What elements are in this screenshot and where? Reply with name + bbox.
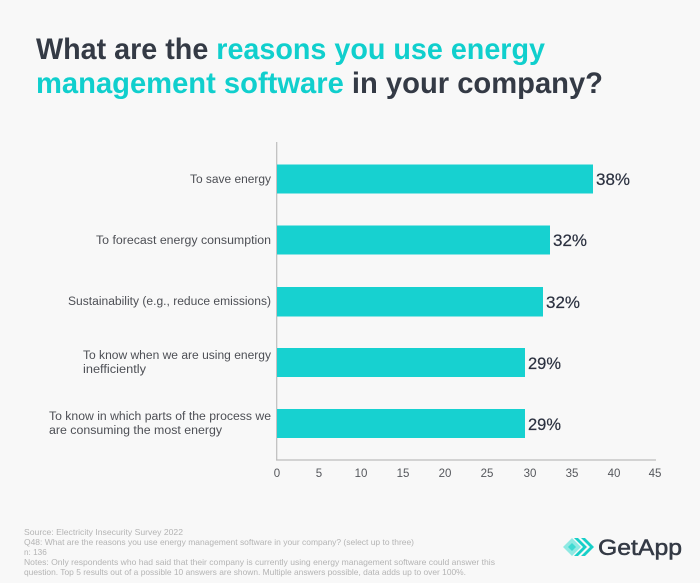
value labels: 38%: [596, 171, 630, 189]
axis tick labels: 25: [481, 468, 493, 480]
category labels: [49, 174, 271, 437]
category labels: To forecast energy consumption: [96, 235, 271, 247]
category labels: To know in which parts of the process we: [49, 411, 271, 423]
title: What are the reasons you use energy: [36, 33, 545, 66]
bars: [277, 164, 593, 438]
source notes: Notes: Only respondents who had said that their company is currently using energy management software could answer this: [24, 558, 495, 567]
axis tick labels: [274, 468, 661, 480]
title: management software in your company?: [36, 67, 603, 100]
bar chart: [49, 142, 661, 480]
source notes: n: 136: [24, 548, 47, 557]
value labels: 29%: [528, 416, 561, 434]
axis tick labels: 30: [524, 468, 536, 480]
source notes: Q48: What are the reasons you use energy management software in your company? (select up to three): [24, 538, 414, 547]
axes: [276, 142, 656, 460]
category labels: are consuming the most energy: [49, 425, 222, 437]
category labels: Sustainability (e.g., reduce emissions): [68, 296, 271, 308]
value labels: 32%: [546, 294, 580, 312]
axis tick labels: 40: [608, 468, 620, 480]
source notes: [24, 528, 495, 577]
axis tick labels: 35: [566, 468, 578, 480]
title: [36, 33, 603, 100]
axis tick labels: 15: [397, 468, 409, 480]
value labels: 29%: [528, 355, 561, 373]
category labels: inefficiently: [83, 364, 146, 376]
category labels: To save energy: [190, 174, 271, 186]
category labels: To know when we are using energy: [83, 350, 271, 362]
value labels: 32%: [553, 232, 587, 250]
value labels: [528, 171, 630, 434]
source notes: Source: Electricity Insecurity Survey 2022: [24, 528, 183, 537]
logo wordmark: GetApp: [598, 535, 682, 560]
icon: logo chevrons: [563, 538, 594, 556]
axis tick labels: 5: [316, 468, 322, 480]
axis tick labels: 45: [649, 468, 661, 480]
axis tick labels: 20: [439, 468, 451, 480]
GetApp logo: [563, 535, 682, 560]
axis tick labels: 10: [355, 468, 367, 480]
axis tick labels: 0: [274, 468, 280, 480]
source notes: question. Top 5 results out of a possible 10 answers are shown. Multiple answers possible, data adds up to over 100%.: [24, 568, 466, 577]
